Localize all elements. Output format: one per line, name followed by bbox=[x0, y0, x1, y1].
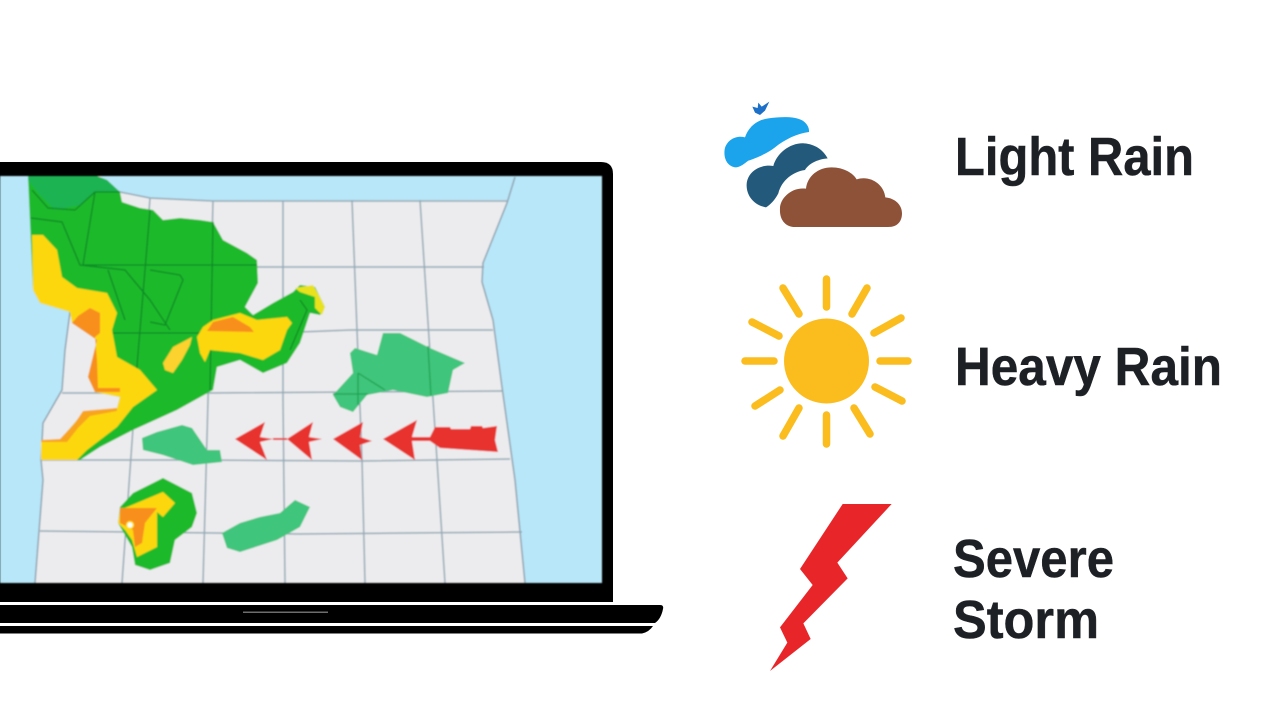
laptop with weather map bbox=[0, 162, 663, 634]
icon: lightning bolt (severe storm) bbox=[770, 504, 892, 671]
orange rain band central bbox=[207, 317, 254, 332]
south cell yellow bbox=[118, 492, 175, 557]
map grid lines bbox=[35, 177, 525, 583]
blue cloud bbox=[724, 117, 809, 167]
label: severe storm: Storm bbox=[953, 590, 1099, 650]
small bird mark bbox=[752, 102, 769, 115]
orange rain band west bbox=[72, 308, 120, 392]
laptop base lower bbox=[0, 626, 653, 634]
arrow 1 bbox=[235, 422, 273, 460]
label: severe storm bbox=[953, 529, 1114, 650]
label: light rain: Light Rain bbox=[955, 127, 1194, 187]
dark cloud bbox=[747, 143, 828, 207]
yellow blob central bbox=[163, 337, 192, 373]
sun disc bbox=[784, 318, 869, 404]
light rain patches bbox=[142, 333, 465, 552]
south cell eye bbox=[126, 522, 134, 528]
orange rain band southwest bbox=[41, 408, 117, 442]
patch south bbox=[222, 500, 310, 552]
map screen bbox=[0, 176, 602, 583]
arrow 3 bbox=[333, 422, 372, 460]
sun rays bbox=[745, 279, 908, 444]
trackpad slot bbox=[243, 612, 328, 613]
label: severe storm: Severe bbox=[953, 529, 1114, 589]
south cell green bbox=[118, 478, 197, 570]
laptop base upper bbox=[0, 605, 663, 623]
yellow rain band central bbox=[197, 313, 292, 362]
patch east lines bbox=[333, 346, 431, 405]
icon: sun (heavy rain) bbox=[745, 279, 908, 444]
icon: clouds (light rain) bbox=[724, 102, 902, 227]
ocean background bbox=[0, 176, 602, 583]
arrow 4 bbox=[383, 420, 498, 460]
yellow rain band west bbox=[32, 235, 157, 460]
patch west bbox=[142, 425, 222, 465]
patch east bbox=[333, 333, 465, 412]
south storm cell bbox=[118, 478, 197, 570]
arrow 2 bbox=[287, 422, 322, 460]
green district lines bbox=[31, 190, 307, 390]
arrow connector bbox=[273, 438, 287, 440]
laptop bezel bbox=[0, 162, 613, 602]
main rain mass: green bbox=[28, 176, 325, 460]
yellow tip northeast bbox=[295, 285, 325, 315]
brown cloud bbox=[780, 167, 902, 227]
label: heavy rain: Heavy Rain bbox=[955, 337, 1222, 397]
darker green northwest region bbox=[28, 176, 120, 210]
south cell orange bbox=[120, 508, 157, 547]
storm direction arrows bbox=[235, 420, 498, 460]
land area bbox=[28, 176, 525, 583]
